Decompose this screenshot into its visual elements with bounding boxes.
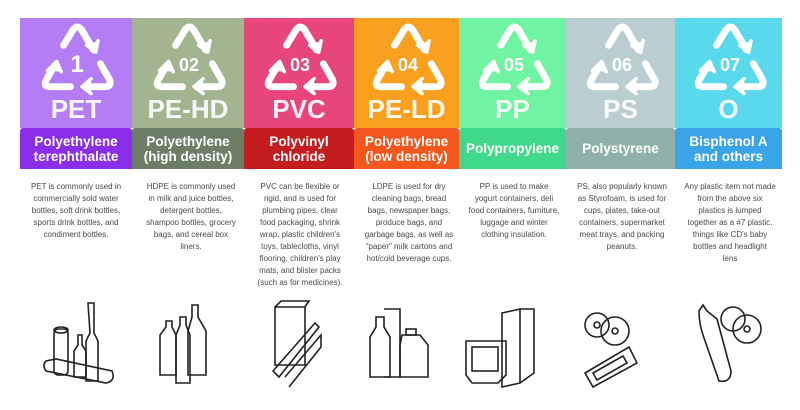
text: LDPE: hot/cold beverage cups.	[367, 254, 451, 263]
text: PS: as Styrofoam, is used for	[578, 194, 666, 203]
text: O: things like CD's baby	[693, 230, 767, 239]
text: PET: bottles, soft drink bottles,	[32, 206, 120, 215]
text: PVC: PVC can be flexible or	[260, 182, 340, 191]
text: PET	[31, 182, 121, 239]
panel: PS	[566, 18, 675, 169]
text: PVC: plumbing pipes, clear	[262, 206, 338, 215]
panel: PE-HD	[132, 18, 244, 169]
text: PP: yogurt containers, deli	[475, 194, 553, 203]
panel: PVC: Polyvinyl	[269, 134, 329, 148]
text: LDPE: "paper" milk cartons and	[366, 242, 452, 251]
text: LDPE: produce bags, and	[376, 218, 442, 227]
icon: TV and fridge	[465, 308, 535, 388]
panel: PE-HD: 02	[179, 55, 199, 75]
text: PVC: flooring, children's play	[259, 254, 341, 263]
text: PVC: mats, and blister packs	[259, 266, 341, 275]
panel: PE-HD: (high density)	[144, 148, 232, 164]
text: PS	[577, 182, 667, 251]
icon: HDPE bottles	[159, 304, 207, 384]
text: PS: meat trays, and packing	[580, 230, 664, 239]
text: PVC: toys, tablecloths, vinyl	[261, 242, 339, 251]
text: PP: PP is used to make	[480, 182, 548, 191]
text: HDPE: in milk and juice bottles,	[149, 194, 233, 203]
text: PVC: (such as for medicines).	[258, 278, 342, 287]
text: O: Any plastic item not made	[684, 182, 776, 191]
panel: PE-LD	[354, 18, 459, 169]
panel: PP: PP	[495, 94, 530, 124]
panel: PE-HD: Polyethylene	[146, 134, 230, 148]
panel: PE-LD: Polyethylene	[365, 134, 448, 148]
text: LDPE	[365, 182, 453, 263]
text: PET: condiment bottles.	[44, 230, 108, 239]
text: O: bottles and headlight	[693, 242, 767, 251]
text: PP: luggage and winter	[480, 218, 548, 227]
icon: jugs	[369, 308, 429, 378]
text: HDPE: shampoo bottles, grocery	[146, 218, 236, 227]
text: PS: cups, plates, take-out	[584, 206, 660, 215]
panel: O: and others	[694, 148, 763, 164]
panel: PVC: PVC	[272, 94, 326, 124]
panel: PET: terephthalate	[34, 148, 118, 164]
panel: PS: PS	[603, 94, 638, 124]
panel: PP: Polypropylene	[466, 141, 559, 156]
panel: PS: 06	[611, 55, 632, 75]
text: O	[684, 182, 776, 263]
panel: PE-LD: 04	[397, 55, 418, 75]
text: PP	[468, 182, 559, 239]
panel: PVC: 03	[290, 55, 310, 75]
text: HDPE: detergent bottles,	[160, 206, 222, 215]
text: LDPE: cleaning bags, bread	[372, 194, 446, 203]
text: PS: containers, supermarket	[579, 218, 665, 227]
text: LDPE: bags, newspaper bags,	[368, 206, 450, 215]
text: O: lens	[723, 254, 737, 263]
text: PS: peanuts.	[607, 242, 637, 251]
panel: O: 07	[719, 55, 740, 75]
panel: O: Bisphenol A	[689, 134, 768, 148]
text: PP: clothing insulation.	[481, 230, 547, 239]
panel: PS: Polystyrene	[582, 141, 659, 156]
panel: PET: Polyethylene	[34, 134, 118, 148]
icon: recycle 1	[42, 24, 114, 96]
icon: bottles	[43, 302, 114, 384]
text: PET: commercially sold water	[33, 194, 119, 203]
panel: PE-LD: PE-LD	[368, 94, 446, 124]
text: PVC: wrap, plastic children's	[260, 230, 340, 239]
text: LDPE: LDPE is used for dry	[372, 182, 446, 191]
text: O: from the above six	[697, 194, 763, 203]
text: O: together as a #7 plastic.	[688, 218, 772, 227]
icon: CDs and tape	[584, 312, 638, 388]
text: PET: PET is commonly used in	[31, 182, 121, 191]
panel: O: O	[718, 94, 739, 124]
icon: recycle 1: 1	[70, 51, 84, 78]
text: PVC: rigid, and is used for	[264, 194, 336, 203]
panel: PVC	[244, 18, 354, 169]
panel: PET	[20, 18, 132, 169]
text: PS: PS, also popularly known	[577, 182, 667, 191]
text: LDPE: garbage bags, as well as	[365, 230, 453, 239]
text: PVC	[258, 182, 342, 287]
icon: pipe and box	[272, 300, 322, 388]
panel: PP: 05	[503, 55, 524, 75]
text: HDPE: HDPE is commonly used	[147, 182, 235, 191]
panel: PET: PET	[51, 94, 101, 124]
text: PVC: food packaging, shrink	[260, 218, 340, 227]
panel: PE-LD: (low density)	[365, 148, 448, 164]
icon: baby bottle and CD	[698, 304, 762, 382]
text: HDPE: liners.	[180, 242, 202, 251]
text: HDPE	[146, 182, 236, 251]
text: HDPE: bags, and cereal box	[154, 230, 228, 239]
text: PET: sports drink bottles, and	[34, 218, 118, 227]
panel: O	[675, 18, 782, 169]
text: PP: food containers, furniture,	[469, 206, 559, 215]
panel: PP	[459, 18, 566, 169]
panel: PE-HD: PE-HD	[148, 94, 228, 124]
panel: PVC: chloride	[273, 148, 325, 164]
text: O: plastics is lumped	[698, 206, 762, 215]
